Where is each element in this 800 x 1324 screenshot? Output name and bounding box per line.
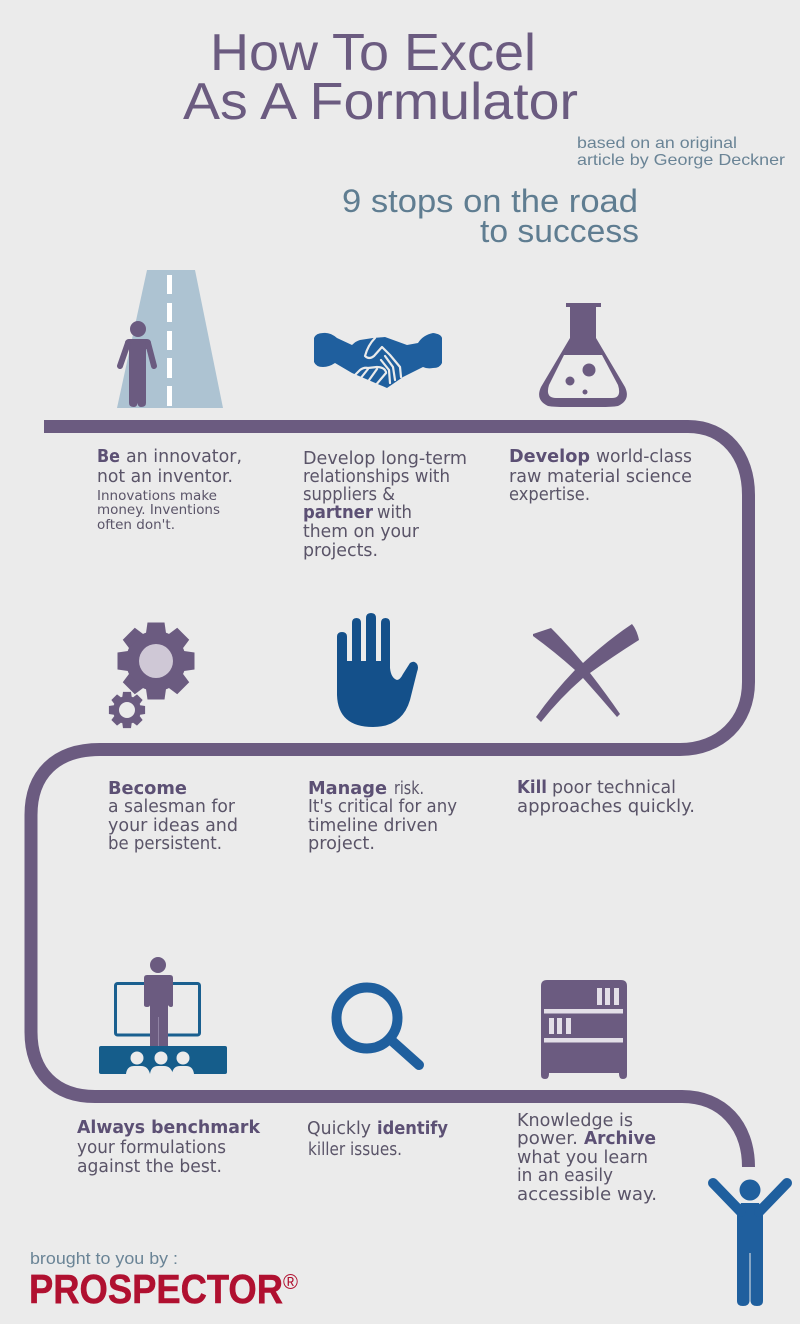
attribution text: based on an original [577,135,737,152]
text: raw material science [509,447,692,505]
text: be an innovator [97,447,242,533]
text: archive knowledge: power. [517,1129,578,1149]
text: manage risk: Manage [308,779,387,799]
text: identify killer issues: identify [377,1119,449,1139]
icon: gears [109,622,194,728]
text: manage risk: It's critical for any [308,797,457,817]
text: develop relationships: Develop long-term [303,449,467,469]
icon: magnifying glass [336,988,419,1065]
title [183,24,578,131]
text: become a salesman: a salesman for [108,797,236,817]
icon: raised hand [337,613,418,727]
text: identify killer issues [307,1119,449,1160]
text: kill poor approaches: poor technical [552,778,676,798]
text: raw material science: raw material science [509,467,692,487]
text: always benchmark [77,1118,260,1177]
text: develop relationships [303,449,467,561]
text: develop relationships: projects. [303,541,378,561]
text: develop relationships: suppliers & [303,485,395,505]
text: be an innovator: an innovator, [126,447,242,467]
text: kill poor approaches [517,778,695,817]
text: be an innovator: Be [97,447,120,467]
title: As A Formulator [183,73,578,131]
text: be an innovator: often don't. [97,517,175,533]
text: be an innovator: Innovations make [97,488,217,504]
text: archive knowledge [517,1111,657,1205]
text: raw material science: world-class [596,447,692,467]
text: archive knowledge: what you learn [517,1148,648,1168]
text: identify killer issues: Quickly [307,1119,371,1139]
text: become a salesman: be persistent. [108,834,222,854]
logo: prospector: PROSPECTOR [29,1266,283,1312]
brought to you by label: brought to you by : [30,1249,178,1268]
attribution text: article by George Deckner [577,152,786,169]
text: manage risk: risk. [394,779,424,799]
title: How To Excel [210,24,536,82]
icon: handshake [314,333,442,388]
text: archive knowledge: accessible way. [517,1185,657,1205]
text: develop relationships: partner [303,503,373,523]
text: archive knowledge: Archive [584,1129,656,1149]
text: become a salesman: your ideas and [108,816,238,836]
subtitle: to success [480,213,639,249]
text: always benchmark: against the best. [77,1157,222,1177]
icon: crossed out x [533,624,639,722]
text: kill poor approaches: approaches quickly. [517,797,695,817]
icon: road with person [117,270,223,408]
text: always benchmark: Always benchmark [77,1118,260,1138]
text: archive knowledge: in an easily [517,1166,613,1186]
text: become a salesman: Become [108,779,187,799]
text: kill poor approaches: Kill [517,778,547,798]
text: raw material science: expertise. [509,485,590,505]
subtitle [342,183,639,249]
attribution text [577,135,786,169]
subtitle: 9 stops on the road [342,183,638,219]
text: develop relationships: relationships with [303,467,450,487]
winding road path [31,426,748,1167]
icon: presenter and audience [99,957,227,1074]
text: manage risk [308,779,457,854]
text: identify killer issues: killer issues. [308,1140,402,1160]
text: manage risk: project. [308,834,375,854]
text: archive knowledge: Knowledge is [517,1111,633,1131]
icon: flask [539,303,627,407]
icon: bookcase [541,980,627,1079]
text: raw material science: Develop [509,447,590,467]
icon: person celebrating [713,1180,787,1306]
logo: prospector: ® [283,1271,298,1294]
text: manage risk: timeline driven [308,816,438,836]
text: develop relationships: with [377,503,412,523]
text: be an innovator: not an inventor. [97,467,233,487]
text: develop relationships: them on your [303,522,420,542]
text: be an innovator: money. Inventions [97,502,220,518]
text: become a salesman [108,779,238,854]
text: always benchmark: your formulations [77,1138,226,1158]
